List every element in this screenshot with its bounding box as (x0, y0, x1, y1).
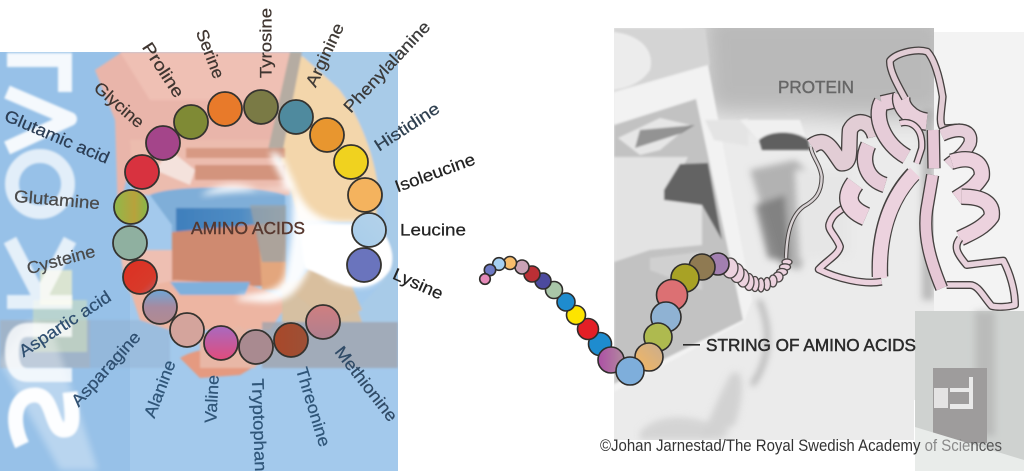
thin connector tube (786, 147, 822, 258)
left ribbon (880, 174, 913, 277)
tablet with hands (614, 28, 810, 392)
amino acid labels: Serine (192, 27, 228, 81)
string of amino acids (480, 253, 792, 385)
heading: amino acids: AMINO ACIDS (191, 218, 305, 238)
big white rotated letterforms (7, 60, 72, 92)
amino acid labels: Asparagine (67, 328, 145, 410)
panel: protein collage background (614, 10, 1024, 471)
top loop (890, 51, 960, 128)
white swooshes (200, 152, 293, 196)
right helix (942, 130, 971, 165)
label: string of amino acids: STRING OF AMINO ACIDS (706, 335, 916, 355)
amino acid labels: Tyrosine (256, 8, 276, 78)
amino acid labels: Isoleucine (392, 150, 478, 196)
amino acid labels: Phenylalanine (340, 17, 434, 117)
amino acid labels: Proline (138, 39, 188, 101)
amino acid labels: Threonine (292, 365, 334, 449)
amino acid labels: Tryptophan (248, 378, 270, 471)
amino acid labels: Lysine (390, 265, 446, 303)
left helix (849, 183, 866, 217)
amino acid labels: Glycine (90, 78, 148, 132)
amino acid labels: Valine (201, 375, 223, 423)
amino acid labels: Alanine (140, 358, 180, 420)
amino acid labels: Leucine (400, 220, 466, 240)
amino acid labels (2, 8, 478, 471)
amino acid labels: Cysteine (25, 242, 97, 278)
heading: protein: PROTEIN (778, 77, 854, 97)
amino acid labels: Methionine (331, 343, 401, 425)
protein ribbon structure (786, 51, 1015, 307)
ring of amino acid circles (113, 90, 386, 364)
amino acid labels: Histidine (371, 99, 443, 155)
panel: amino acids collage background (0, 52, 398, 471)
amino acid labels: Arginine (302, 20, 348, 90)
amino acid labels: Glutamine (13, 187, 101, 213)
credit line: ©Johan Jarnestad/The Royal Swedish Academy of Sciences (600, 436, 1002, 455)
amino acid labels: Glutamic acid (2, 106, 112, 168)
lower-right grey poster (915, 311, 1024, 471)
descending strand (926, 130, 942, 288)
coil leading into protein (722, 258, 792, 292)
amino acid labels: Aspartic acid (15, 287, 115, 361)
